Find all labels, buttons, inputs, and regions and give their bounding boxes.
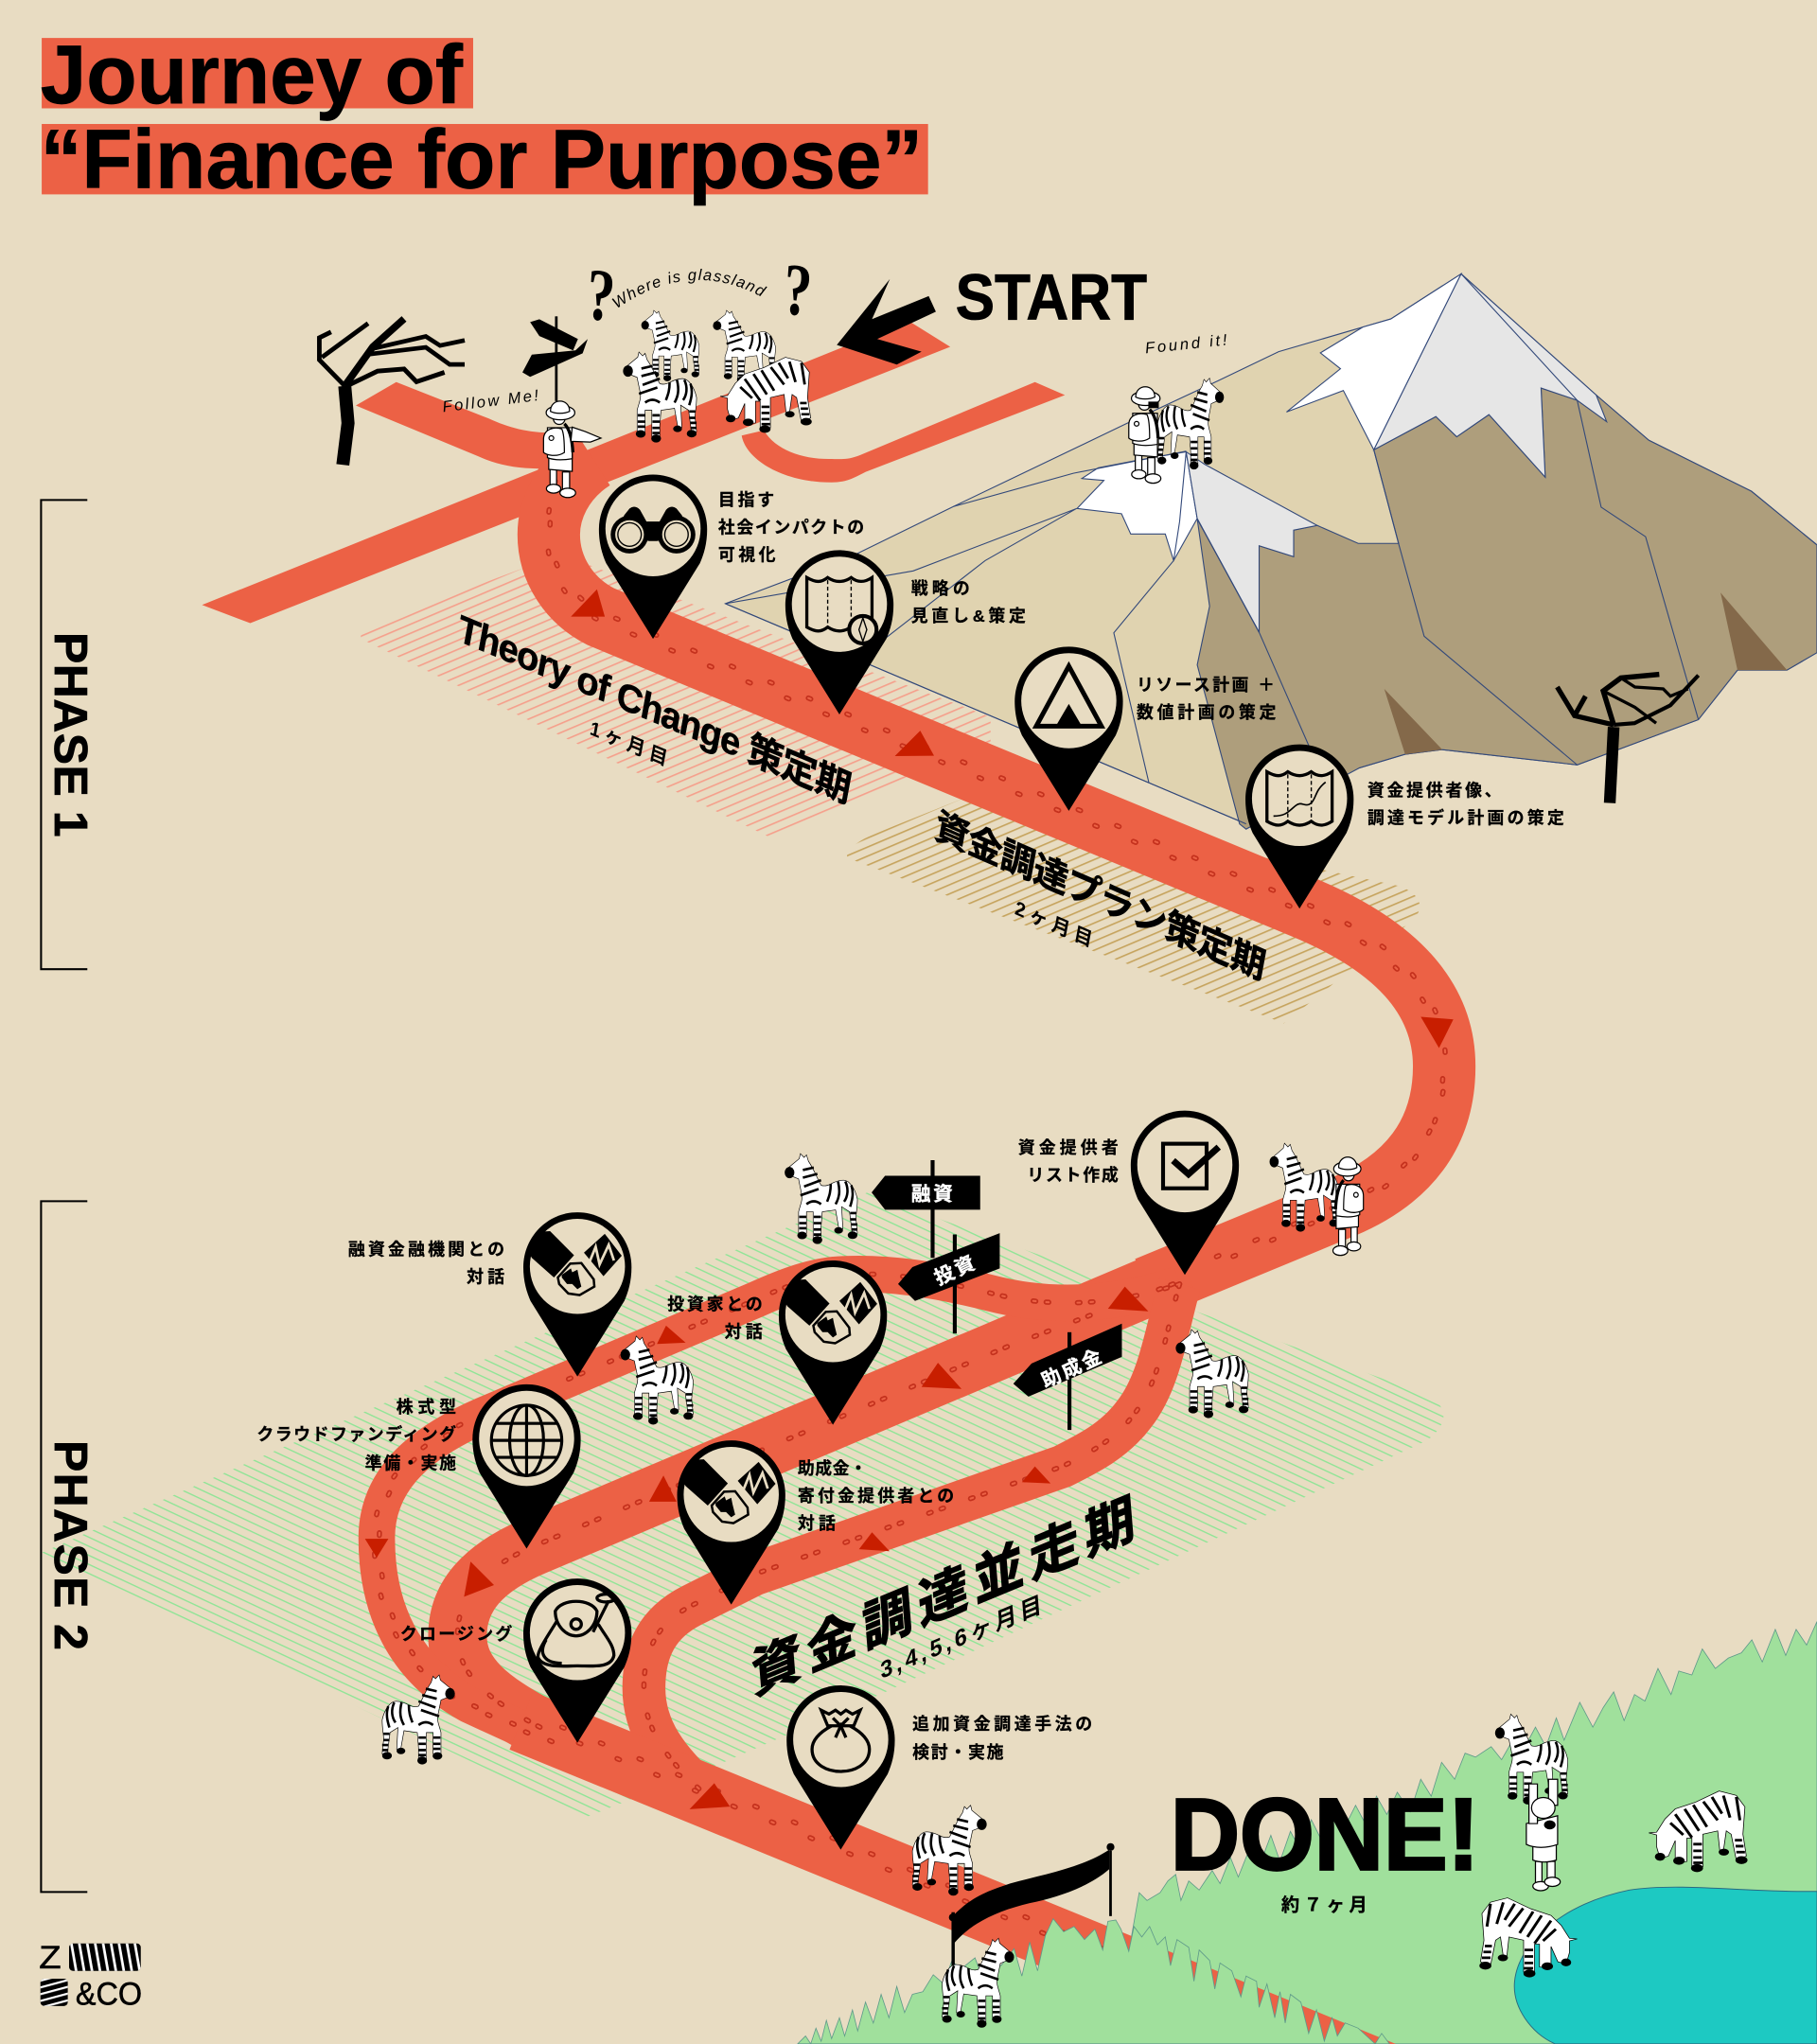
- sign: 助成金: 助成金: [1038, 1344, 1107, 1393]
- isometric text: funding plan: 資金調達プラン策定期: [932, 805, 1269, 988]
- label: grants: [798, 1458, 954, 1533]
- pin: handshake grant: [678, 1440, 785, 1605]
- isometric text: theory of change: Theory of Change 策定期: [454, 608, 855, 812]
- label: additional funding: 追加資金調達手法の: [912, 1715, 1092, 1734]
- hatched zone: funding plan: [847, 795, 1420, 1023]
- phase 2 bracket: PHASE 2: [44, 1440, 97, 1650]
- label: investor dialogue: [667, 1295, 763, 1341]
- phase 1 bracket: [41, 500, 97, 969]
- start label: START: [956, 261, 1147, 334]
- question marks and speech: Follow Me!: [441, 386, 540, 415]
- label: funder list: 資金提供者: [1018, 1138, 1119, 1157]
- sign post top: [522, 316, 588, 401]
- label: strategy: [911, 578, 1026, 626]
- sign: 投資: [898, 1233, 999, 1333]
- label: strategy: 見直し&策定: [911, 607, 1026, 626]
- dead tree right: [1557, 675, 1699, 803]
- question marks and speech: [441, 248, 1229, 415]
- title: [41, 27, 928, 206]
- hatched zone: phase 2 parallel fundraising: [39, 1192, 1443, 1817]
- title: Journey of: [41, 27, 464, 121]
- question marks and speech: Where is glassland: [611, 269, 767, 308]
- pin: money sack: [786, 1685, 895, 1850]
- label: strategy: 戦略の: [911, 578, 970, 598]
- done label: DONE!: [1171, 1777, 1479, 1891]
- label: grants: 対話: [798, 1514, 836, 1533]
- start arrow: [837, 279, 936, 364]
- mountain: [725, 273, 1817, 829]
- label: funders: 資金提供者像、: [1367, 782, 1502, 801]
- hatched zone: theory of change: [361, 555, 991, 838]
- grassland back: [1132, 1622, 1817, 2044]
- isometric text: parallel fundraising: 資金調達並走期: [750, 1488, 1137, 1706]
- label: grants: 助成金・: [798, 1458, 867, 1478]
- pin: handshake investor: [779, 1260, 887, 1425]
- logo: Z: [39, 1940, 62, 1976]
- sign: 融資: [872, 1160, 980, 1258]
- question marks and speech: ?: [781, 248, 815, 333]
- sign: 融資: 融資: [911, 1184, 956, 1206]
- label: resources: 数値計画の策定: [1137, 703, 1277, 722]
- explorers: [543, 387, 1561, 1891]
- label: impact: 可視化: [718, 545, 776, 564]
- label: funders: 調達モデル計画の策定: [1367, 808, 1564, 828]
- label: grants: 寄付金提供者との: [798, 1487, 954, 1506]
- label: funder list: [1018, 1138, 1119, 1185]
- label: investor dialogue: 対話: [725, 1322, 763, 1341]
- done label: 約７ヶ月: [1281, 1894, 1367, 1915]
- label: investor dialogue: 投資家との: [667, 1295, 763, 1313]
- road network: [202, 321, 1447, 2044]
- pin: globe: [472, 1384, 581, 1548]
- label: impact: 社会インパクトの: [718, 519, 864, 537]
- direction arrows on the road: [365, 590, 1454, 1809]
- label: crowdfunding: [256, 1398, 456, 1472]
- phase 1 bracket: PHASE 1: [44, 632, 97, 837]
- isometric text: parallel fundraising: 3,4,5,6ヶ月目: [879, 1592, 1043, 1684]
- pins and icons: [472, 475, 1353, 1850]
- label: crowdfunding: 株式型: [397, 1398, 456, 1417]
- question marks and speech: ?: [584, 254, 618, 339]
- label: crowdfunding: クラウドファンディング: [256, 1424, 456, 1444]
- finish banner: [949, 1843, 1115, 1990]
- pin: backpack closing: [523, 1578, 631, 1743]
- label: additional funding: 検討・実施: [912, 1743, 1004, 1762]
- sign: 助成金: [1014, 1324, 1121, 1430]
- label: impact: 目指す: [718, 490, 774, 510]
- isometric text: funding plan: 2ヶ月目: [1014, 897, 1094, 952]
- label: additional funding: [912, 1715, 1092, 1762]
- label: funders: [1367, 782, 1564, 828]
- title: “Finance for Purpose”: [41, 113, 923, 206]
- label: bank dialogue: 融資金融機関との: [348, 1241, 504, 1260]
- sign: 投資: 投資: [931, 1251, 980, 1290]
- pin: map with growth chart: [1245, 745, 1353, 908]
- label: bank dialogue: 対話: [467, 1267, 504, 1286]
- label: closing: クロージング: [400, 1624, 512, 1644]
- pin: handshake loan: [523, 1212, 631, 1377]
- phase 2 bracket: [41, 1201, 97, 1892]
- dead tree left: [319, 319, 465, 465]
- logo: [39, 1940, 142, 2013]
- isometric text: theory of change: 1ヶ月目: [589, 717, 669, 770]
- label: resources: [1137, 676, 1277, 722]
- grassland front: [798, 1919, 1389, 2044]
- lake: [1514, 1887, 1817, 2044]
- label: bank dialogue: [348, 1241, 504, 1286]
- pin: checkbox: [1131, 1111, 1239, 1275]
- zebras: [382, 310, 1748, 2028]
- pin: tent: [1014, 646, 1123, 811]
- question marks and speech: Found it!: [1144, 330, 1229, 357]
- label: funder list: リスト作成: [1027, 1165, 1119, 1185]
- pin: binoculars: [599, 475, 707, 639]
- footprints along the road: [374, 481, 1445, 1959]
- label: resources: リソース計画 ＋: [1137, 676, 1275, 695]
- logo: &CO: [76, 1977, 142, 2013]
- label: crowdfunding: 準備・実施: [365, 1453, 456, 1472]
- label: impact: [718, 490, 864, 564]
- pin: map and compass: [785, 550, 893, 714]
